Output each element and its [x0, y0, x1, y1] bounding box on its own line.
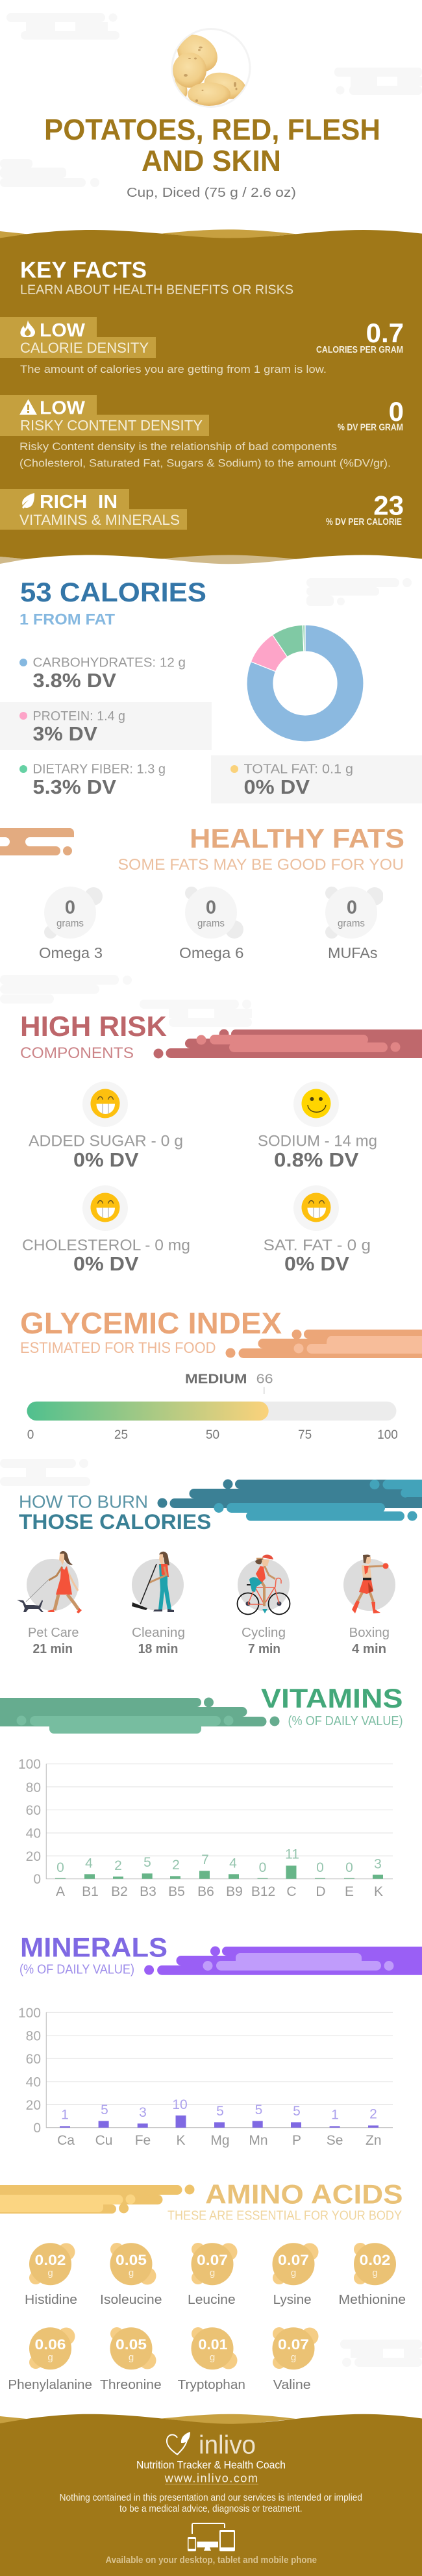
heading: key facts: KEY FACTS — [20, 257, 147, 283]
amino: threonine: 0.05 — [116, 2336, 147, 2353]
background clouds — [0, 975, 252, 1027]
background cloud left — [6, 13, 119, 40]
amino: tryptophan: Tryptophan — [178, 2378, 245, 2392]
panel: how to burn calories — [0, 1459, 422, 1656]
subheading: (% OF DAILY VALUE) — [19, 1963, 134, 1977]
activity: cycling — [238, 1554, 290, 1656]
panel: glycemic index — [20, 1306, 422, 1442]
panel: healthy fats — [0, 823, 404, 961]
subheading: from fat: 1 FROM FAT — [19, 611, 115, 629]
bar chart: vitamins: B1 — [82, 1884, 99, 1899]
background cloud — [0, 1459, 90, 1486]
bar chart: minerals: 0 — [33, 2121, 41, 2136]
bar chart: minerals: Zn — [366, 2133, 382, 2148]
amino: methionine: Methionine — [339, 2293, 406, 2307]
amino: leucine: g — [210, 2267, 215, 2279]
bar chart: minerals: 80 — [26, 2029, 41, 2043]
decorative bars — [0, 1698, 279, 1734]
activity: cycling: 7 min — [248, 1641, 280, 1656]
background cloud — [306, 578, 412, 606]
logo: inlivo: inlivo — [199, 2431, 256, 2460]
bar chart: minerals: 1 — [331, 2108, 339, 2123]
subheading: (% OF DAILY VALUE) — [288, 1714, 403, 1728]
bar chart: vitamins: 4 — [229, 1856, 237, 1871]
saturated fat — [264, 1185, 371, 1275]
bar chart: minerals: 5 — [216, 2104, 224, 2119]
activity: boxing — [343, 1555, 395, 1656]
amino: leucine — [188, 2243, 238, 2307]
activity: boxing: Boxing — [349, 1625, 390, 1640]
row: rich in vitamins and minerals: RICH IN — [40, 492, 118, 512]
amino: phenylalanine: 0.06 — [35, 2336, 66, 2353]
icon: grin face — [301, 1193, 331, 1222]
amino: histidine: Histidine — [25, 2293, 77, 2307]
omega 3: grams — [56, 918, 84, 929]
subheading: COMPONENTS — [20, 1044, 134, 1062]
bar chart: minerals: Se — [327, 2133, 343, 2148]
activity: cleaning — [132, 1552, 185, 1656]
bar chart: minerals: 100 — [18, 2006, 41, 2021]
bar chart: minerals: 5 — [101, 2102, 108, 2117]
bar chart: minerals: 60 — [26, 2052, 41, 2067]
footer — [0, 2414, 422, 2576]
bar chart: vitamins: 40 — [26, 1826, 41, 1841]
serving size: Cup, Diced (75 g / 2.6 oz) — [127, 186, 296, 200]
row: risky content density: (Cholesterol, Saturated Fat, Sugars & Sodium) to the amount (%DV/gr). — [19, 457, 391, 469]
activity: cycling: Cycling — [242, 1625, 286, 1640]
decorative bars — [144, 1946, 422, 1975]
mufas — [325, 887, 384, 961]
gauge label: MEDIUM — [185, 1372, 247, 1387]
row: risky content density: 0 — [389, 396, 404, 427]
bar chart: vitamins: 80 — [26, 1780, 41, 1795]
bar chart: minerals: P — [292, 2133, 301, 2148]
bar chart: minerals: Fe — [135, 2133, 151, 2148]
amino: threonine — [100, 2327, 162, 2392]
omega 3 — [39, 887, 103, 961]
icon: smile face — [301, 1089, 331, 1118]
bar chart: vitamins — [18, 1757, 393, 1899]
bar chart: vitamins: B6 — [197, 1884, 214, 1899]
bar chart: minerals: Mn — [249, 2133, 268, 2148]
legend: protein: PROTEIN: 1.4 g — [32, 709, 125, 724]
icon: woman sweeping — [132, 1552, 174, 1612]
wave edge — [0, 2414, 296, 2426]
icon: grin face — [91, 1193, 119, 1222]
amino: valine: g — [291, 2352, 296, 2363]
gauge scale: 100 — [377, 1428, 398, 1442]
bar chart: minerals: K — [176, 2133, 186, 2148]
background cloud — [340, 2340, 422, 2367]
panel: how to burn calories: THOSE CALORIES — [19, 1510, 211, 1534]
bar chart: vitamins: E — [345, 1884, 354, 1899]
bar chart: minerals: 10 — [172, 2097, 188, 2112]
legend: carbohydrates: 3.8% DV — [32, 670, 117, 692]
amino: tryptophan — [178, 2327, 245, 2392]
gauge label — [185, 1372, 273, 1387]
bar chart: vitamins: B3 — [140, 1884, 156, 1899]
bar chart: vitamins: A — [56, 1884, 65, 1899]
amino: tryptophan: g — [210, 2352, 215, 2363]
cholesterol: CHOLESTEROL - 0 mg — [22, 1237, 190, 1254]
omega 6: Omega 6 — [179, 944, 244, 961]
bar chart: vitamins: B2 — [111, 1884, 128, 1899]
gauge scale — [27, 1428, 398, 1442]
bar chart: vitamins: 60 — [26, 1803, 41, 1818]
gauge scale: 75 — [298, 1428, 312, 1442]
icon: leaf — [22, 493, 34, 509]
bar chart: minerals: 40 — [26, 2075, 41, 2090]
bar chart: vitamins: 2 — [114, 1858, 122, 1873]
bar chart: vitamins: 5 — [143, 1855, 151, 1870]
bar chart: vitamins: B9 — [226, 1884, 243, 1899]
bar chart: minerals — [18, 2006, 393, 2148]
row: rich in vitamins and minerals: % DV PER CALORIE — [326, 517, 402, 527]
amino: methionine: 0.02 — [360, 2252, 391, 2268]
row: rich in vitamins and minerals — [0, 489, 404, 530]
bar chart: vitamins: B5 — [168, 1884, 185, 1899]
amino: threonine: Threonine — [100, 2378, 162, 2392]
food image: potatoes — [170, 27, 250, 107]
amino: tryptophan: 0.01 — [199, 2336, 227, 2353]
mufas: 0 — [347, 898, 357, 918]
bar chart: minerals: 2 — [369, 2107, 377, 2122]
amino: phenylalanine: Phenylalanine — [8, 2378, 92, 2392]
omega 6: 0 — [206, 898, 216, 918]
bar chart: minerals: 5 — [293, 2104, 301, 2119]
amino: histidine — [25, 2243, 77, 2307]
bar chart: minerals: 1 — [61, 2108, 69, 2123]
bar chart: vitamins: 3 — [374, 1857, 382, 1872]
sodium: SODIUM - 14 mg — [258, 1133, 377, 1150]
omega 6: grams — [197, 918, 225, 929]
disclaimer: to be a medical advice, diagnosis or treatment. — [119, 2504, 303, 2514]
amino: lysine — [273, 2243, 318, 2307]
amino: methionine: g — [372, 2267, 378, 2279]
bar chart: minerals: Ca — [57, 2133, 75, 2148]
amino: threonine: g — [129, 2352, 134, 2363]
bar chart: vitamins: 0 — [316, 1860, 324, 1875]
bar chart: vitamins: 0 — [33, 1872, 41, 1887]
row: risky content density: RISKY CONTENT DENSITY — [20, 418, 203, 434]
activity: cleaning: Cleaning — [132, 1625, 185, 1640]
bar chart: vitamins: C — [286, 1884, 297, 1899]
title: AND SKIN — [142, 144, 281, 177]
icon: flame — [20, 320, 35, 337]
gauge bar — [27, 1402, 396, 1421]
heading: 53 calories: 53 CALORIES — [20, 577, 206, 607]
panel: calories — [0, 577, 422, 803]
row: calorie density: CALORIES PER GRAM — [316, 345, 403, 355]
amino: phenylalanine — [8, 2327, 92, 2392]
activity: cleaning: 18 min — [138, 1641, 178, 1656]
legend: dietary fiber: DIETARY FIBER: 1.3 g — [32, 762, 166, 777]
bar chart: vitamins: K — [374, 1884, 383, 1899]
bar chart: vitamins: 0 — [56, 1860, 64, 1875]
cholesterol: 0% DV — [73, 1253, 139, 1275]
legend: protein — [19, 709, 125, 745]
title — [44, 113, 380, 177]
activity: pet care: Pet Care — [28, 1625, 79, 1640]
panel: key facts — [0, 229, 422, 564]
saturated fat: SAT. FAT - 0 g — [264, 1237, 371, 1254]
gauge scale: 0 — [27, 1428, 34, 1442]
amino: isoleucine: g — [129, 2267, 134, 2279]
bar chart: vitamins: 100 — [18, 1757, 41, 1772]
amino: isoleucine: Isoleucine — [100, 2293, 162, 2307]
row: rich in vitamins and minerals: 23 — [373, 490, 404, 521]
icon: warning — [19, 399, 37, 415]
heading: MINERALS — [20, 1932, 168, 1963]
donut chart — [247, 625, 364, 742]
tagline: Nutrition Tracker & Health Coach — [136, 2459, 286, 2471]
icon: grin face — [91, 1089, 119, 1118]
amino: isoleucine: 0.05 — [116, 2252, 147, 2268]
sodium — [258, 1081, 377, 1171]
legend backgrounds — [0, 702, 422, 803]
legend: total fat: TOTAL FAT: 0.1 g — [244, 762, 353, 777]
amino: isoleucine — [100, 2243, 162, 2307]
bar chart: vitamins: 20 — [26, 1849, 41, 1864]
decorative bars — [0, 2185, 195, 2214]
legend: protein: 3% DV — [32, 723, 98, 745]
heading: HIGH RISK — [20, 1011, 168, 1042]
decorative bars — [226, 1330, 422, 1358]
bar chart: vitamins: 7 — [201, 1852, 209, 1867]
header section — [45, 28, 379, 199]
icon: woman walking dog — [17, 1551, 82, 1613]
logo: inlivo — [167, 2431, 256, 2460]
subheading: ESTIMATED FOR THIS FOOD — [20, 1339, 216, 1357]
amino: methionine — [339, 2243, 406, 2307]
bar chart: vitamins: D — [316, 1884, 326, 1899]
legend: dietary fiber: 5.3% DV — [32, 776, 117, 798]
row: rich in vitamins and minerals: VITAMINS & MINERALS — [19, 512, 180, 528]
panel: high risk components — [0, 975, 422, 1275]
sodium: 0.8% DV — [274, 1149, 359, 1171]
legend: total fat: 0% DV — [244, 776, 310, 798]
heading: HEALTHY FATS — [190, 823, 404, 853]
disclaimer — [60, 2493, 362, 2514]
website: www.inlivo.com — [164, 2472, 258, 2485]
heading: AMINO ACIDS — [205, 2179, 403, 2210]
amino: leucine: 0.07 — [197, 2252, 228, 2268]
gauge scale: 25 — [114, 1428, 128, 1442]
legend: carbohydrates — [19, 655, 186, 692]
amino: valine: Valine — [273, 2378, 311, 2392]
panel: amino acids — [0, 2179, 422, 2392]
heading: HOW TO BURN — [19, 1492, 148, 1512]
omega 6 — [179, 887, 244, 961]
bar chart: minerals: Mg — [210, 2133, 230, 2148]
subheading: LEARN ABOUT HEALTH BENEFITS OR RISKS — [20, 283, 293, 297]
amino: histidine: 0.02 — [35, 2252, 66, 2268]
heading: VITAMINS — [261, 1683, 403, 1713]
amino: phenylalanine: g — [47, 2352, 53, 2363]
bar chart: vitamins: 2 — [172, 1858, 180, 1873]
bar chart: minerals: 3 — [139, 2105, 147, 2120]
decorative bars — [153, 1029, 422, 1059]
activity: boxing: 4 min — [352, 1641, 386, 1656]
amino: lysine: g — [291, 2267, 296, 2279]
disclaimer: Nothing contained in this presentation and our services is intended or implied — [60, 2493, 362, 2503]
availability note: Available on your desktop, tablet and mobile phone — [105, 2555, 317, 2566]
saturated fat: 0% DV — [284, 1253, 350, 1275]
amino: histidine: g — [47, 2267, 53, 2279]
mufas: grams — [338, 918, 365, 929]
row: calorie density: LOW — [40, 320, 86, 341]
amino: valine — [273, 2327, 318, 2392]
icon: boxer — [352, 1555, 388, 1613]
row: calorie density: 0.7 — [366, 318, 404, 348]
activity: pet care — [17, 1551, 82, 1656]
cholesterol — [22, 1185, 190, 1275]
bar chart: vitamins: B12 — [251, 1884, 275, 1899]
row: calorie density: CALORIE DENSITY — [20, 340, 149, 356]
activity: pet care: 21 min — [32, 1641, 73, 1656]
amino: lysine: 0.07 — [278, 2252, 309, 2268]
bar chart: vitamins: 0 — [259, 1860, 266, 1875]
wave edges — [0, 229, 296, 240]
title: POTATOES, RED, FLESH — [44, 113, 380, 146]
bar chart: vitamins: 11 — [285, 1847, 299, 1862]
added sugar: ADDED SUGAR - 0 g — [29, 1133, 183, 1150]
icon: devices — [188, 2523, 235, 2551]
row: risky content density: Risky Content density is the relationship of bad components — [19, 441, 337, 453]
row: risky content density: % DV PER GRAM — [338, 423, 403, 433]
heading: GLYCEMIC INDEX — [20, 1306, 282, 1340]
amino: leucine: Leucine — [188, 2293, 236, 2307]
bar chart: vitamins: 0 — [345, 1860, 353, 1875]
row: calorie density — [0, 317, 404, 375]
bar chart: minerals: Cu — [95, 2133, 112, 2148]
decorative bars — [157, 1480, 422, 1521]
decorative bars — [0, 828, 74, 855]
added sugar — [29, 1081, 183, 1171]
amino: lysine: Lysine — [273, 2293, 312, 2307]
background cloud right — [334, 68, 422, 95]
mufas: MUFAs — [328, 944, 378, 961]
subheading: SOME FATS MAY BE GOOD FOR YOU — [118, 856, 404, 874]
legend: total fat — [230, 762, 353, 798]
panel: vitamins — [0, 1683, 403, 1899]
amino: valine: 0.07 — [278, 2336, 309, 2353]
added sugar: 0% DV — [73, 1149, 139, 1171]
row: risky content density — [0, 395, 404, 469]
row: calorie density: The amount of calories you are getting from 1 gram is low. — [20, 364, 327, 375]
omega 3: Omega 3 — [39, 944, 103, 961]
background cloud lower left — [0, 159, 99, 187]
row: risky content density: LOW — [40, 398, 86, 418]
bar chart: minerals: 20 — [26, 2098, 41, 2113]
gauge label: 66 — [256, 1372, 273, 1387]
gauge scale: 50 — [206, 1428, 219, 1442]
legend: carbohydrates: CARBOHYDRATES: 12 g — [32, 655, 186, 670]
panel: minerals — [18, 1932, 422, 2148]
bar chart: vitamins: 4 — [85, 1856, 93, 1871]
omega 3: 0 — [65, 898, 75, 918]
bar chart: minerals: 5 — [255, 2102, 262, 2117]
icon: cyclist — [238, 1554, 290, 1615]
legend: dietary fiber — [19, 762, 166, 798]
